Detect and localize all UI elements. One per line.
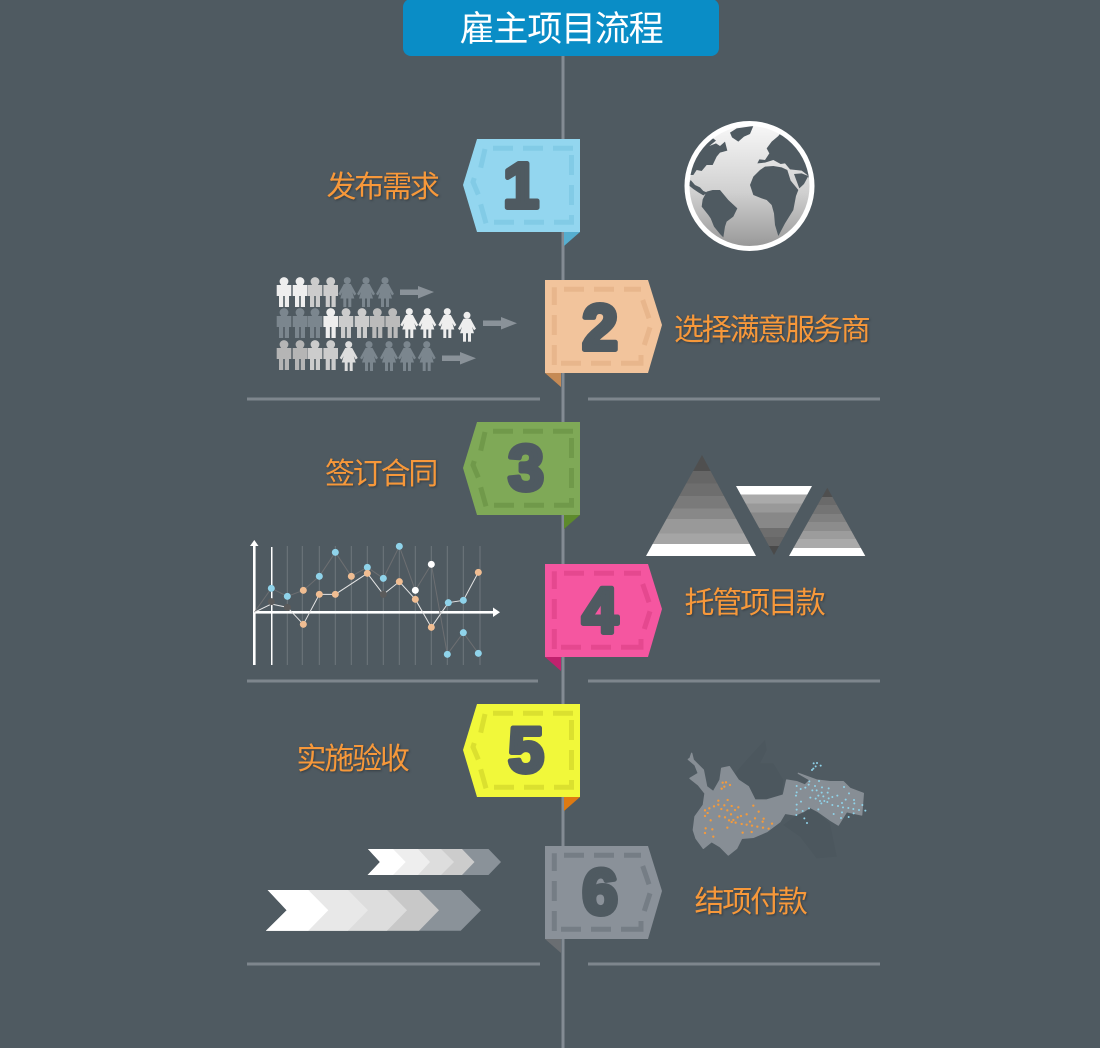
- central timeline: [562, 50, 564, 1048]
- icon: triangle charts: [640, 455, 870, 556]
- step 2 flag: [545, 280, 662, 387]
- step 3 flag: 3: [508, 432, 544, 504]
- step 6 flag: [545, 846, 662, 953]
- step 5 flag: [463, 704, 580, 811]
- step 4 flag: 4: [582, 574, 618, 646]
- icon: people rows: [277, 277, 517, 371]
- title banner: 雇主项目流程: [460, 10, 663, 49]
- section divider row 1: [247, 398, 880, 400]
- step 1 label: 发布需求: [326, 171, 439, 204]
- step 5 flag: 5: [508, 714, 544, 786]
- icon: globe: [687, 124, 817, 248]
- step 3 flag: [463, 422, 580, 529]
- step 4 label: 托管项目款: [684, 587, 826, 620]
- step 2 flag: 2: [582, 292, 618, 364]
- title banner: [403, 0, 719, 56]
- step 5 label: 实施验收: [296, 743, 409, 776]
- section divider row 2: [247, 680, 880, 682]
- line chart: [250, 540, 500, 665]
- step 3 label: 签订合同: [325, 458, 436, 491]
- step 6 label: 结项付款: [694, 886, 808, 919]
- step 1 flag: 1: [503, 150, 539, 222]
- step 1 flag: [463, 139, 580, 246]
- step 4 flag: [545, 564, 662, 671]
- step 2 label: 选择满意服务商: [674, 314, 870, 347]
- icon: chevron arrows: [266, 849, 501, 931]
- section divider row 3: [247, 962, 880, 966]
- step 6 flag: 6: [582, 856, 618, 928]
- icon: dot map: [688, 740, 866, 858]
